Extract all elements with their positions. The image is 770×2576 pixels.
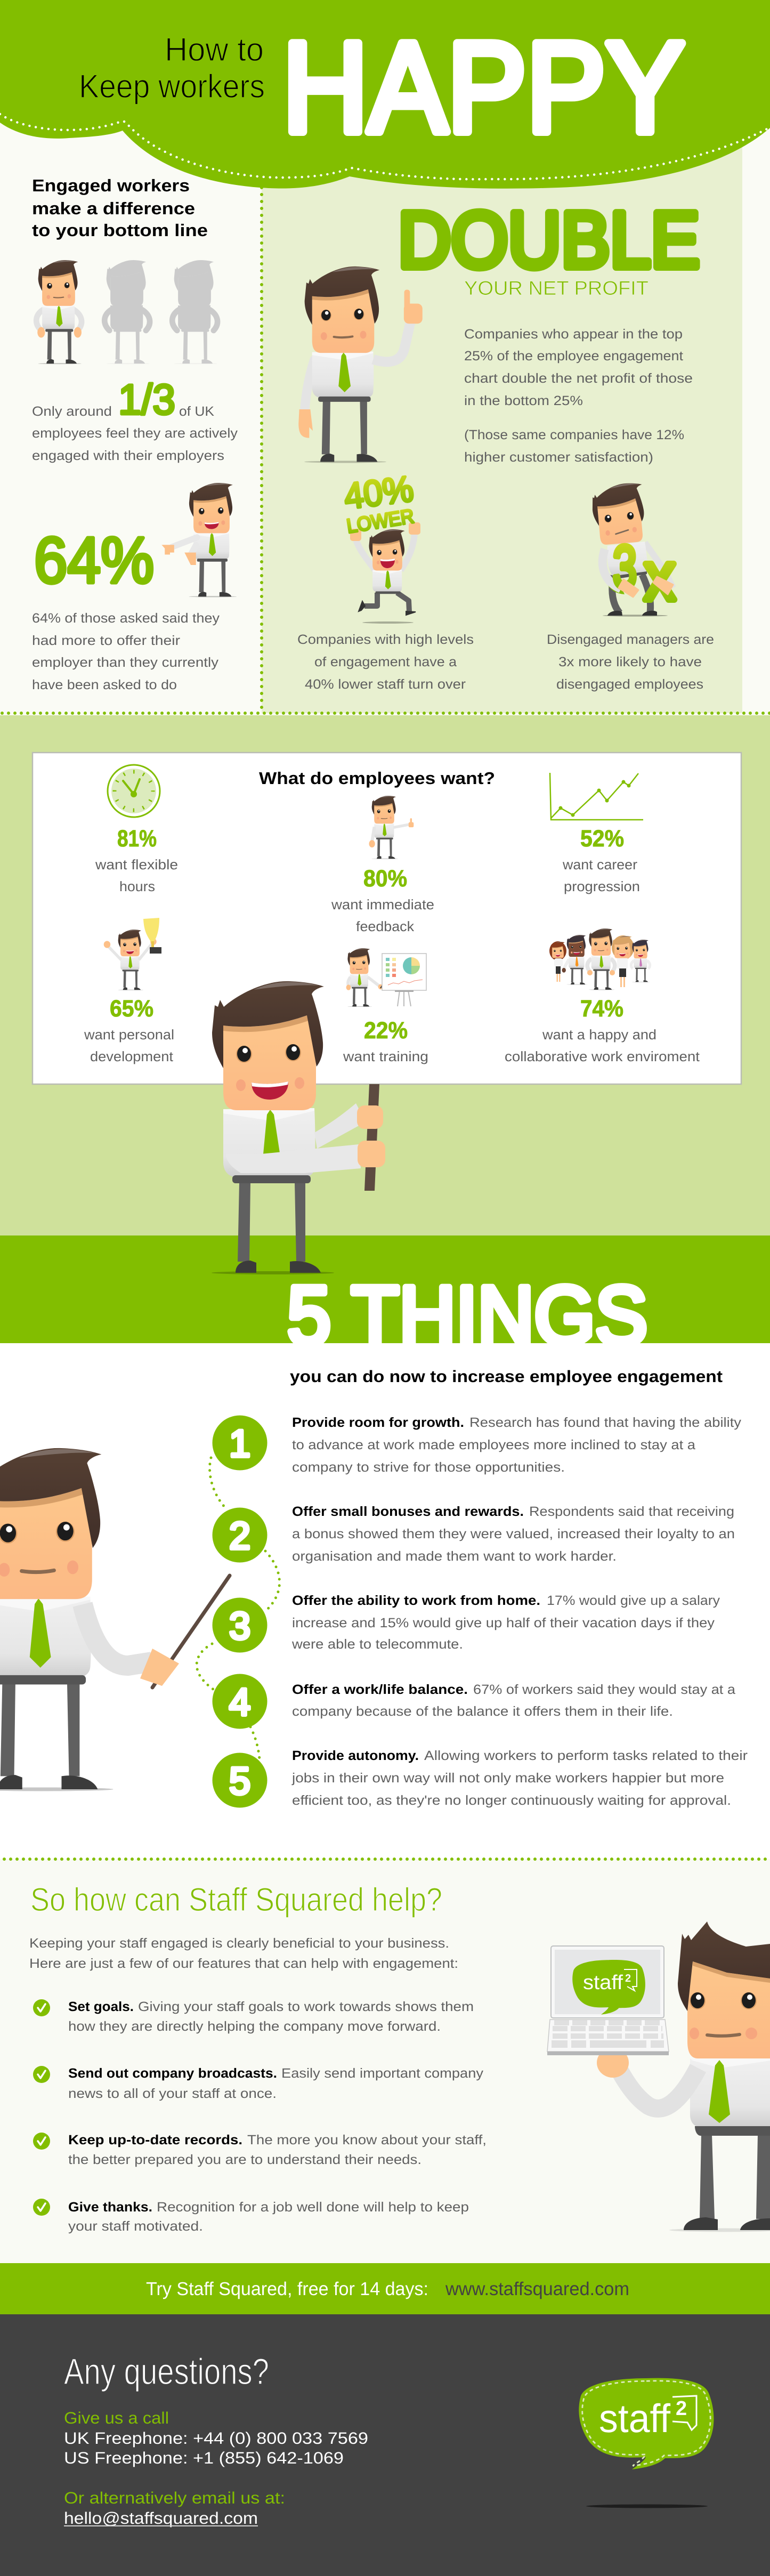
text: 40 percent lower staff turnover xyxy=(297,632,474,692)
green shadow of 3 and rear arm xyxy=(604,577,625,594)
laptop xyxy=(547,1946,669,2055)
heading: 5 things: 5 THINGS xyxy=(287,1270,647,1362)
feature: give thanks: Give thanks. xyxy=(68,2200,152,2215)
intro text xyxy=(29,1936,458,1971)
torso and head xyxy=(369,529,405,594)
stat: 74 percent: 74% xyxy=(580,996,623,1022)
stat: 65 percent: 65% xyxy=(110,996,153,1022)
call to action band xyxy=(0,2263,770,2314)
item 2: bonuses and rewards xyxy=(212,1504,735,1564)
text: 40 percent lower staff turnover: Companies with high levels xyxy=(297,632,474,647)
eyes, cheeks and mouth xyxy=(690,1992,757,2039)
white card xyxy=(33,753,741,1084)
item 1: room for growth: 1 xyxy=(229,1423,250,1465)
text: 64 percent explanation: had more to offer their xyxy=(32,633,180,648)
contact: email: hello@staffsquared.com xyxy=(64,2509,258,2527)
text: website: www.staffsquared.com xyxy=(445,2279,629,2299)
stat: 22 percent: want training xyxy=(343,1048,428,1064)
subheading: you can do now: you can do now to increase employee engagement xyxy=(290,1367,723,1386)
text: 40 percent lower staff turnover: 40% lower staff turn over xyxy=(305,677,466,692)
illustration: man with pointer stick xyxy=(0,1448,230,1791)
title: how to keep workers xyxy=(79,31,265,105)
text: 3x: 3 xyxy=(613,534,637,600)
title: how to keep workers: Keep workers xyxy=(79,68,265,105)
item 1: room for growth xyxy=(212,1415,742,1475)
item 3: work from home: 17% would give up a salary xyxy=(547,1593,720,1608)
item 3: work from home: increase and 15% would give up half of their vacation days if they xyxy=(292,1616,715,1630)
illustration: big man holding the sign xyxy=(212,981,385,1274)
item 1: room for growth: company to strive for those opportunities. xyxy=(292,1460,565,1475)
stat: 52 percent: want career xyxy=(562,857,637,873)
text: 40 percent lower staff turnover: of engagement have a xyxy=(314,655,457,669)
contact: email xyxy=(64,2489,285,2527)
stat: 52 percent xyxy=(562,826,640,894)
item 2: bonuses and rewards: a bonus showed them they were valued, increased their loyalty to an xyxy=(292,1527,735,1541)
list: five things xyxy=(212,1415,748,1808)
man in the centre xyxy=(587,928,615,990)
item 5: autonomy: Provide autonomy. xyxy=(292,1748,419,1763)
vertical dotted divider xyxy=(260,188,263,712)
stat: one third of UK employees: of UK xyxy=(179,404,214,419)
contact: phone numbers: US Freephone: +1 (855) 642-1069 xyxy=(64,2449,344,2467)
forehead shade xyxy=(693,1961,770,1983)
contact: phone numbers: Give us a call xyxy=(64,2409,169,2427)
five things green band background xyxy=(0,1235,770,1343)
logo: staff squared speech bubble xyxy=(579,2378,714,2469)
stat: 80 percent xyxy=(331,866,434,934)
stat: 74 percent: want a happy and xyxy=(542,1027,656,1043)
text: disengaged managers: Disengaged managers are xyxy=(547,632,714,647)
white stitched edge xyxy=(0,114,770,179)
section background: what do employees want xyxy=(0,715,770,1235)
feature: up-to-date records: The more you know about your staff, xyxy=(247,2133,487,2147)
feature: company broadcasts: news to all of your staff at once. xyxy=(68,2086,277,2101)
stat: 64 percent: 64% xyxy=(34,524,154,596)
item 4: work life balance: 4 xyxy=(229,1681,250,1724)
item 5: autonomy: 5 xyxy=(229,1760,250,1803)
stat: 81 percent: hours xyxy=(119,878,155,894)
feature: up-to-date records: Keep up-to-date records. xyxy=(68,2133,242,2147)
panel: so how can staff squared help xyxy=(29,1881,770,2234)
feature: company broadcasts xyxy=(33,2066,484,2101)
heading: engaged workers: make a difference xyxy=(32,199,195,218)
woman with red hair xyxy=(549,941,566,982)
logo: staff squared speech bubble: staff xyxy=(599,2396,670,2441)
face xyxy=(687,1961,770,2058)
text: companies in top 25 percent: higher customer satisfaction) xyxy=(464,450,653,465)
stat: 74 percent xyxy=(505,996,700,1064)
text: free trial: Try Staff Squared, free for 14 days: xyxy=(146,2279,428,2299)
item 4: work life balance: company because of the balance it offers them in their life. xyxy=(292,1704,673,1719)
white background of five things section xyxy=(0,1343,770,1859)
collar xyxy=(690,2058,770,2068)
text: companies in top 25 percent: chart double the net profit of those xyxy=(464,371,693,386)
green wavy banner shape xyxy=(0,0,770,189)
legs and shoes xyxy=(359,593,416,615)
panel: engaged workers xyxy=(32,176,238,692)
text: disengaged managers xyxy=(547,632,714,692)
feature: set goals xyxy=(33,1999,474,2034)
intro text: Keeping your staff engaged is clearly beneficial to your business. xyxy=(29,1936,449,1951)
stat: 80 percent: feedback xyxy=(356,918,415,934)
feature: up-to-date records: the better prepared you are to understand their needs. xyxy=(68,2152,422,2167)
illustration: man holding laptop xyxy=(547,1921,770,2232)
stat: 81 percent: 81% xyxy=(117,826,157,852)
feature: give thanks: your staff motivated. xyxy=(68,2219,203,2234)
logo: staff squared speech bubble: 2 xyxy=(676,2397,687,2420)
item 1: room for growth: to advance at work made employees more inclined to stay at a xyxy=(292,1438,695,1452)
feature: company broadcasts: Easily send important company xyxy=(281,2066,484,2081)
icon: man giving thumbs up xyxy=(369,796,414,859)
section background: how staff squared helps xyxy=(0,1859,770,2263)
stat: 80 percent: 80% xyxy=(363,866,407,892)
item 4: work life balance xyxy=(212,1674,735,1729)
contact: phone numbers: UK Freephone: +44 (0) 800 033 7569 xyxy=(64,2429,368,2448)
stat: 74 percent: collaborative work enviroment xyxy=(505,1048,700,1064)
icon: man pointing left xyxy=(161,483,237,597)
man with dark skin xyxy=(562,935,588,985)
laptop: staff xyxy=(583,1972,623,1994)
heading: what do employees want: What do employees want? xyxy=(259,769,495,788)
item 2: bonuses and rewards: 2 xyxy=(229,1515,250,1557)
belt xyxy=(695,2126,770,2136)
text: 40%: 40% xyxy=(342,469,416,517)
legs and shoes xyxy=(684,2135,770,2230)
panel: double your net profit xyxy=(297,196,714,692)
icon: frowning man holding 3x xyxy=(590,482,675,617)
item 2: bonuses and rewards: organisation and made them want to work harder. xyxy=(292,1549,617,1564)
panel: what do employees want xyxy=(33,753,741,1084)
icon: man pointing up xyxy=(298,267,423,463)
heading: engaged workers xyxy=(32,176,208,240)
panel: double net profit tinted column xyxy=(262,133,742,713)
arm and hand xyxy=(615,2063,698,2109)
item 5: autonomy xyxy=(212,1748,748,1808)
dotted divider above staff squared section xyxy=(4,1858,770,1861)
text: 64 percent explanation: employer than they currently xyxy=(32,655,219,670)
hair xyxy=(678,1921,770,2011)
heading: double: DOUBLE xyxy=(398,196,700,284)
item 4: work life balance: 67% of workers said they would stay at a xyxy=(473,1682,735,1697)
woman with blonde hair xyxy=(612,935,634,987)
item 5: autonomy: Allowing workers to perform tasks related to their xyxy=(424,1748,748,1763)
stat: 52 percent: 52% xyxy=(580,826,624,852)
item 5: autonomy: jobs in their own way will not only make workers happier but more xyxy=(291,1771,724,1786)
shirt xyxy=(690,2058,770,2127)
text: companies in top 25 percent: in the bottom 25% xyxy=(464,393,583,408)
stat: 22 percent xyxy=(343,1018,428,1064)
stat: 81 percent xyxy=(95,826,178,894)
item 4: work life balance: Offer a work/life balance. xyxy=(292,1682,468,1697)
icon: clock xyxy=(108,765,160,817)
item 2: bonuses and rewards: Offer small bonuses and rewards. xyxy=(292,1504,524,1519)
feature: set goals: how they are directly helping the company move forward. xyxy=(68,2019,441,2034)
text: 64 percent explanation: have been asked to do xyxy=(32,677,177,692)
feature: company broadcasts: Send out company broadcasts. xyxy=(68,2066,277,2081)
sign pole xyxy=(364,1084,379,1191)
item 3: work from home: Offer the ability to work from home. xyxy=(292,1593,540,1608)
icon: jumping man holding 40% lower xyxy=(342,469,420,624)
stat: one third of UK employees xyxy=(32,376,238,463)
text: companies in top 25 percent: (Those same companies have 12% xyxy=(464,427,684,442)
stat: 81 percent: want flexible xyxy=(95,857,178,873)
stat: 80 percent: want immediate xyxy=(331,897,434,912)
heading: engaged workers: to your bottom line xyxy=(32,221,208,240)
stat: 65 percent: development xyxy=(90,1048,174,1064)
arms and hands xyxy=(350,522,420,570)
stat: one third of UK employees: engaged with their employers xyxy=(32,448,224,463)
text: disengaged managers: 3x more likely to have xyxy=(558,655,702,669)
shadow xyxy=(603,615,668,617)
stat: 52 percent: progression xyxy=(564,878,640,894)
title: how to keep workers: How to xyxy=(165,31,264,68)
item 2: bonuses and rewards: Respondents said that receiving xyxy=(529,1504,734,1519)
head xyxy=(590,482,647,546)
horizontal dotted divider under top section xyxy=(2,712,770,715)
logo shadow xyxy=(586,2504,708,2508)
hands xyxy=(357,1105,383,1129)
figure xyxy=(212,981,334,1274)
hands xyxy=(619,577,673,597)
feature: up-to-date records xyxy=(33,2133,487,2167)
contact: email: Or alternatively email us at: xyxy=(64,2489,285,2507)
item 3: work from home: were able to telecommute. xyxy=(291,1637,463,1652)
intro text: Here are just a few of our features that can help with engagement: xyxy=(29,1956,458,1971)
item 5: autonomy: efficient too, as they're no longer continuously waiting for approval. xyxy=(292,1793,731,1808)
icon: one man in colour, two grey silhouettes xyxy=(36,260,217,364)
icon: man with trophy xyxy=(104,918,161,990)
text: lower: LOWER xyxy=(345,505,416,537)
front arm xyxy=(226,1144,361,1173)
heading: so how can staff squared help: So how can Staff Squared help? xyxy=(30,1881,442,1918)
connector: dotted line between numbered circles xyxy=(197,1458,279,1759)
page background: off-white top area xyxy=(0,0,770,715)
stat: one third of UK employees: Only around xyxy=(32,404,112,419)
text: 3x xyxy=(613,534,675,614)
icon: happy team of five xyxy=(549,928,650,990)
text: 3x: x xyxy=(644,538,675,614)
text: disengaged managers: disengaged employees xyxy=(556,677,703,692)
item 3: work from home xyxy=(212,1593,720,1652)
stat: 22 percent: 22% xyxy=(364,1018,408,1044)
item 1: room for growth: Research has found that having the ability xyxy=(469,1415,742,1430)
text: companies in top 25 percent: 25% of the employee engagement xyxy=(464,349,683,364)
tie xyxy=(709,2060,730,2123)
subheading: your net profit: YOUR NET PROFIT xyxy=(464,277,649,299)
stat: 65 percent xyxy=(84,996,174,1064)
text: companies in top 25 percent xyxy=(464,327,693,465)
heading: any questions: Any questions? xyxy=(64,2351,269,2392)
feature: set goals: Giving your staff goals to work towards shows them xyxy=(138,1999,474,2014)
footer panel xyxy=(0,2314,770,2576)
shadow xyxy=(669,2228,770,2232)
item 1: room for growth: Provide room for growth. xyxy=(292,1415,464,1430)
text: 64 percent explanation: 64% of those asked said they xyxy=(32,611,220,626)
left arm xyxy=(603,549,621,589)
stat: one third of UK employees: employees feel they are actively xyxy=(32,426,238,441)
laptop: 2 xyxy=(625,1973,631,1984)
contact: phone numbers xyxy=(64,2409,368,2467)
shadow xyxy=(362,621,414,624)
text: 64 percent explanation xyxy=(32,611,220,692)
man on the right xyxy=(631,940,650,982)
item 3: work from home: 3 xyxy=(229,1605,250,1648)
title: happy: HAPPY xyxy=(282,16,685,159)
legs and shoes xyxy=(612,575,651,613)
feature: give thanks: Recognition for a job well done will help to keep xyxy=(157,2200,469,2215)
icon: man presenting a chart xyxy=(346,948,426,1007)
chart: rising line xyxy=(550,773,643,820)
shirt and belt xyxy=(607,542,647,576)
rear arm xyxy=(314,1103,366,1149)
feature: give thanks xyxy=(33,2199,469,2234)
text: companies in top 25 percent: Companies who appear in the top xyxy=(464,327,683,342)
header banner xyxy=(0,0,770,189)
heading: engaged workers: Engaged workers xyxy=(32,176,190,195)
stat: 65 percent: want personal xyxy=(84,1027,174,1043)
feature: set goals: Set goals. xyxy=(68,1999,134,2014)
stat: one third of UK employees: 1/3 xyxy=(118,376,175,423)
